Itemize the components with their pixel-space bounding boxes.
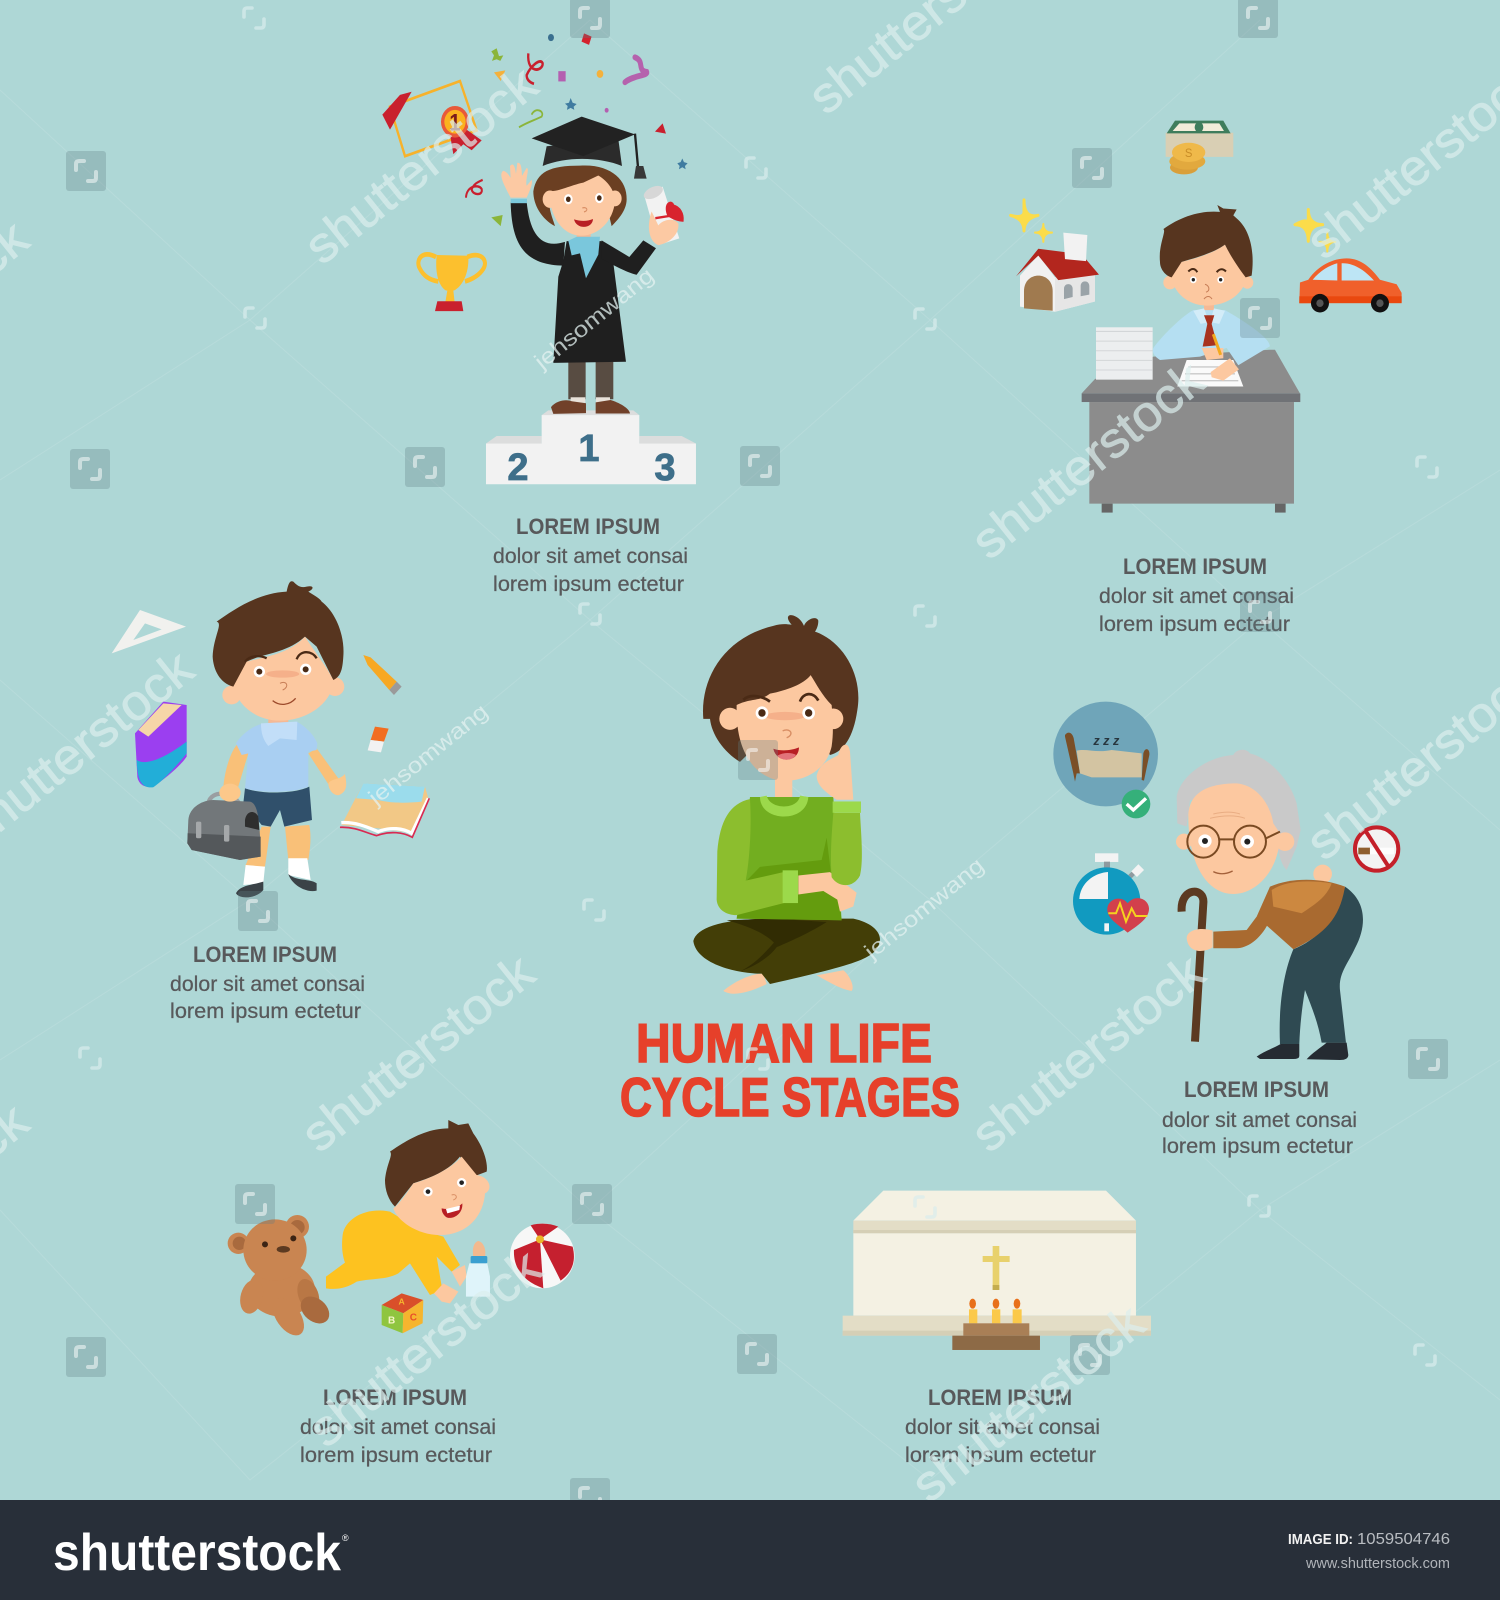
- footer logo: ®: [342, 1533, 349, 1543]
- watermarks: shutterstock: [961, 350, 1215, 570]
- footer bar: [0, 1500, 1500, 1600]
- icon: pencil: [363, 655, 402, 695]
- watermarks: shutterstock: [901, 1293, 1155, 1513]
- panel: school child stage: [112, 581, 429, 1023]
- caption: death: dolor sit amet consai: [905, 1416, 1100, 1439]
- illustration: school child: [112, 581, 429, 897]
- illustration: tomb with cross and candles: [843, 1191, 1151, 1350]
- icon: house: [1011, 200, 1099, 312]
- old man figure: [1176, 750, 1363, 1060]
- caption: elderly: [1162, 1077, 1357, 1158]
- podium: [486, 410, 696, 484]
- caption: elderly: lorem ipsum ectetur: [1162, 1135, 1353, 1158]
- icon: eraser: [368, 727, 389, 752]
- icon: stopwatch with heart: [1073, 853, 1149, 935]
- panel: graduate stage: [382, 33, 696, 596]
- caption: graduate: LOREM IPSUM: [516, 514, 660, 539]
- icon: no smoking: [1355, 827, 1398, 871]
- icon: alphabet block: [382, 1293, 423, 1333]
- caption: death: [905, 1385, 1100, 1467]
- icon: confetti: [466, 33, 688, 226]
- icon: money and coins: S: [1185, 148, 1193, 160]
- illustration: thinking person sitting cross-legged: [693, 615, 880, 994]
- icon: desk: [1082, 350, 1300, 513]
- icon: purple book: [135, 702, 187, 787]
- watermarks: jehsomwang: [858, 853, 989, 965]
- panel: central figure and title: [620, 615, 960, 1128]
- footer image id: IMAGE ID:: [1288, 1531, 1353, 1548]
- caption: working adult: lorem ipsum ectetur: [1099, 613, 1290, 636]
- caption: school child: [170, 942, 365, 1023]
- title: HUMAN LIFE: [636, 1012, 932, 1074]
- icon: open book: [340, 783, 429, 837]
- podium numbers: [507, 428, 676, 489]
- footer logo: shutterstock: [53, 1524, 341, 1582]
- title: CYCLE STAGES: [620, 1066, 960, 1128]
- icon: teddy bear: [228, 1215, 335, 1341]
- caption: school child: LOREM IPSUM: [193, 942, 337, 967]
- watermarks: shutterstock: [298, 1238, 552, 1458]
- icon: money and coins: [1166, 121, 1233, 174]
- child figure: [187, 581, 346, 897]
- footer image id: [1288, 1531, 1450, 1572]
- icon: certificate with medal: [382, 81, 482, 156]
- icon: alphabet block: B: [388, 1315, 395, 1326]
- caption: elderly: LOREM IPSUM: [1184, 1077, 1329, 1102]
- caption: baby: LOREM IPSUM: [323, 1385, 467, 1410]
- footer image id: 1059504746: [1357, 1531, 1450, 1548]
- panel: baby stage: [228, 1120, 575, 1467]
- panel: working adult stage: [1011, 121, 1402, 636]
- caption: elderly: dolor sit amet consai: [1162, 1109, 1357, 1132]
- footer image id: www.shutterstock.com: [1305, 1556, 1450, 1572]
- icon: set square: [112, 610, 186, 653]
- watermarks: shutterstock: [294, 55, 548, 275]
- watermarks: jehsomwang: [362, 699, 493, 811]
- caption: school child: lorem ipsum ectetur: [170, 1000, 361, 1023]
- icon: healthy sleep: [1053, 702, 1158, 818]
- watermarks: shutterstock: [961, 943, 1215, 1163]
- illustration: graduate on podium: [382, 33, 696, 484]
- caption: working adult: [1099, 554, 1294, 636]
- caption: baby: lorem ipsum ectetur: [300, 1444, 492, 1467]
- icon: walking cane: [1182, 892, 1203, 1042]
- caption: baby: [300, 1385, 496, 1467]
- icon: baby bottle: [466, 1241, 490, 1297]
- watermarks: jehsomwang: [528, 263, 659, 375]
- podium numbers: 1: [578, 428, 600, 470]
- caption: working adult: dolor sit amet consai: [1099, 585, 1294, 608]
- icon: alphabet block: C: [410, 1313, 417, 1324]
- podium numbers: 3: [654, 447, 676, 489]
- icon: wooden steps: [952, 1323, 1040, 1350]
- caption: working adult: LOREM IPSUM: [1123, 554, 1267, 579]
- icon: candles: [969, 1299, 1022, 1323]
- icon: cross: [983, 1246, 1010, 1290]
- caption: death: LOREM IPSUM: [928, 1385, 1072, 1410]
- illustration: elderly man: [1053, 702, 1398, 1060]
- watermarks: shutterstock: [291, 943, 545, 1163]
- caption: graduate: [493, 514, 688, 596]
- icon: beach ball: [510, 1224, 575, 1288]
- panel: death stage: [843, 1191, 1151, 1467]
- caption: graduate: dolor sit amet consai: [493, 545, 688, 568]
- icon: alphabet block: A: [399, 1296, 406, 1306]
- icon: certificate with medal: 1: [449, 109, 461, 136]
- illustration: worker at desk: [1011, 121, 1402, 513]
- icon: trophy: [418, 254, 485, 311]
- icon: car: [1295, 210, 1402, 312]
- caption: school child: dolor sit amet consai: [170, 973, 365, 996]
- illustration: crawling baby with toys: [228, 1120, 575, 1341]
- caption: death: lorem ipsum ectetur: [905, 1444, 1096, 1467]
- podium numbers: 2: [507, 447, 529, 489]
- graduate figure: [501, 117, 683, 414]
- icon: stack of papers: [1096, 327, 1243, 387]
- panel: elderly stage: [1053, 702, 1398, 1158]
- caption: graduate: lorem ipsum ectetur: [493, 573, 684, 596]
- worker figure: [1153, 205, 1270, 381]
- caption: baby: dolor sit amet consai: [300, 1416, 496, 1439]
- icon: healthy sleep: z z z: [1092, 734, 1120, 748]
- baby figure: [326, 1120, 490, 1303]
- title: [620, 1012, 960, 1128]
